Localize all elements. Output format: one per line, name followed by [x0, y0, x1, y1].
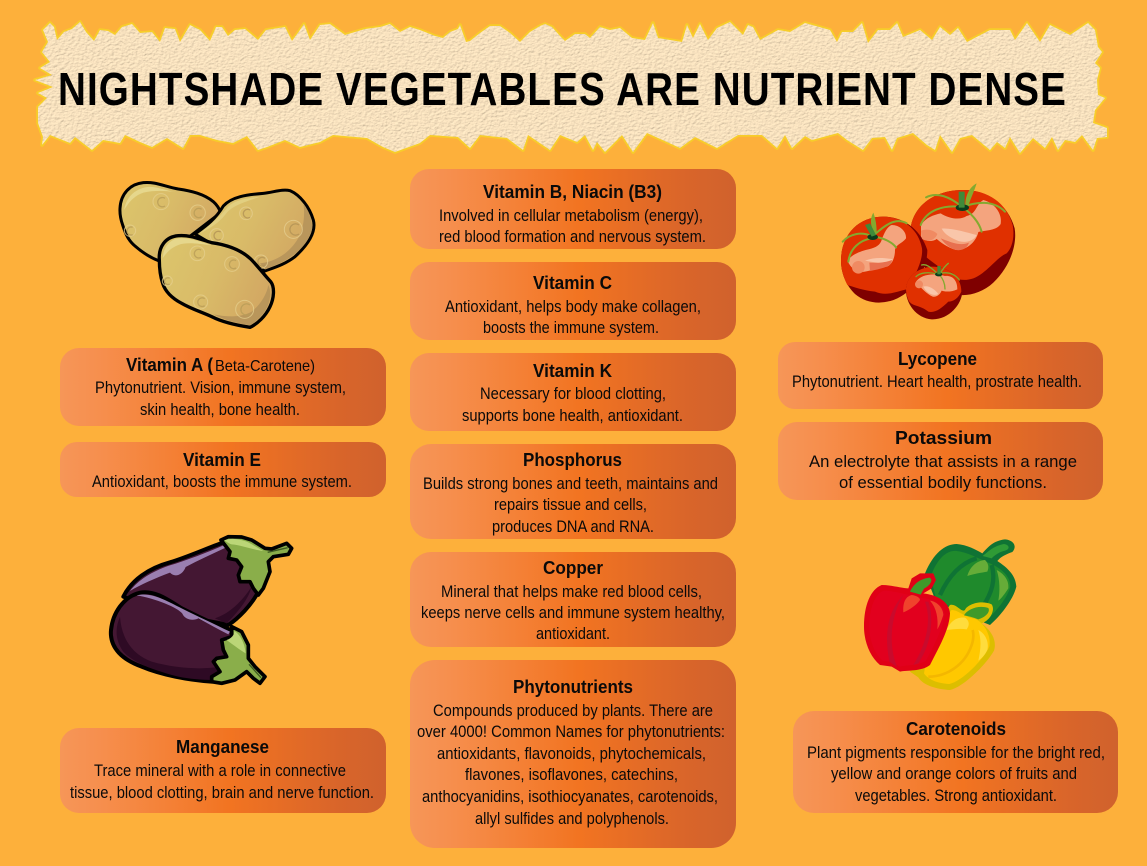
- tomato: small: [906, 263, 962, 319]
- heading: Vitamin B: Vitamin B, Niacin (B3): [483, 181, 662, 202]
- heading: Phosphorus: Phosphorus: [523, 449, 622, 470]
- body: Vitamin K: [462, 385, 683, 425]
- heading: Lycopene: Lycopene: [898, 348, 977, 369]
- body: Manganese: [70, 762, 374, 802]
- body: Phosphorus: Builds strong bones and teeth, maintains and: [423, 475, 718, 493]
- pepper: red: [864, 573, 950, 672]
- body: Phytonutrients: antioxidants, flavonoids, phytochemicals,: [437, 745, 706, 763]
- icon: potatoes: [120, 182, 314, 327]
- tomato: left: [841, 213, 927, 303]
- body: Vitamin C: boosts the immune system.: [483, 319, 659, 337]
- tomato: large: [911, 183, 1015, 295]
- eggplant caps: [212, 537, 292, 683]
- body: Copper: keeps nerve cells and immune system healthy,: [421, 604, 725, 622]
- panel: Copper: [410, 552, 736, 647]
- potato: front: [159, 236, 273, 327]
- heading: Carotenoids: Carotenoids: [906, 718, 1006, 739]
- body: Carotenoids: yellow and orange colors of fruits and: [831, 765, 1077, 783]
- eggplant: front: [111, 592, 239, 682]
- body: Carotenoids: [807, 744, 1105, 805]
- body: Vitamin A: skin health, bone health.: [140, 401, 300, 419]
- body: Carotenoids: Plant pigments responsible for the bright red,: [807, 744, 1105, 762]
- icon: bell peppers: [864, 539, 1016, 690]
- panel: Vitamin B, Niacin: [410, 169, 736, 249]
- heading: Copper: Copper: [543, 557, 603, 578]
- heading: Vitamin C: Vitamin C: [533, 272, 612, 293]
- body: Phosphorus: [423, 475, 718, 536]
- panel: Lycopene: [778, 342, 1103, 409]
- panel: Carotenoids: [793, 711, 1118, 813]
- body: Manganese: tissue, blood clotting, brain and nerve function.: [70, 784, 374, 802]
- body: Copper: antioxidant.: [536, 625, 610, 643]
- heading: Vitamin K: Vitamin K: [533, 360, 613, 381]
- panel: Vitamin C: [410, 262, 736, 340]
- potato: back left: [120, 182, 221, 261]
- body: Carotenoids: vegetables. Strong antioxidant.: [855, 787, 1057, 805]
- heading: Phytonutrients: Phytonutrients: [513, 676, 633, 697]
- body: Phosphorus: repairs tissue and cells,: [494, 496, 647, 514]
- pepper: green: [925, 539, 1016, 625]
- body: Vitamin A: Phytonutrient. Vision, immune system,: [95, 379, 346, 397]
- panel: Manganese: [60, 728, 386, 813]
- body: Vitamin C: Antioxidant, helps body make collagen,: [445, 298, 701, 316]
- body: Vitamin B: Involved in cellular metabolism (energy),: [439, 207, 703, 225]
- body: Vitamin B: [439, 207, 706, 246]
- body: Potassium: [809, 453, 1077, 492]
- body: Copper: [421, 583, 725, 643]
- body: Phytonutrients: Compounds produced by plants. There are: [433, 702, 713, 720]
- body: Vitamin E: Antioxidant, boosts the immune system.: [92, 473, 352, 491]
- body: Copper: Mineral that helps make red blood cells,: [441, 583, 702, 601]
- panel: Potassium: [778, 422, 1103, 500]
- body: Manganese: Trace mineral with a role in connective: [94, 762, 346, 780]
- body: Vitamin B: red blood formation and nervous system.: [439, 228, 706, 246]
- heading: Vitamin A: Vitamin A (: [126, 354, 214, 375]
- body: Vitamin K: Necessary for blood clotting,: [480, 385, 666, 403]
- pepper: yellow: [910, 602, 995, 690]
- body: Lycopene: Phytonutrient. Heart health, prostrate health.: [792, 373, 1082, 391]
- body: Phytonutrients: allyl sulfides and polyphenols.: [475, 810, 669, 828]
- eggplant: back: [123, 542, 258, 625]
- title banner: [35, 22, 1107, 153]
- heading suffix: Beta-Carotene: Beta-Carotene): [215, 358, 315, 375]
- body: Potassium: An electrolyte that assists in a range: [809, 453, 1077, 471]
- body: Phytonutrients: [417, 702, 725, 828]
- heading: Potassium: Potassium: [895, 427, 992, 448]
- panel: Vitamin A: [60, 348, 386, 426]
- body: Vitamin A: [95, 379, 346, 419]
- panel: Phytonutrients: [410, 660, 736, 848]
- heading: Vitamin E: Vitamin E: [183, 449, 261, 470]
- heading: Manganese: Manganese: [176, 736, 269, 757]
- body: Potassium: of essential bodily functions.: [839, 474, 1047, 492]
- body: Phytonutrients: anthocyanidins, isothiocyanates, carotenoids,: [422, 788, 718, 806]
- icon: tomatoes: [841, 183, 1015, 319]
- body: Phytonutrients: over 4000! Common Names for phytonutrients:: [417, 723, 725, 741]
- panel: Phosphorus: [410, 444, 736, 539]
- body: Vitamin C: [445, 298, 701, 337]
- body: Phosphorus: produces DNA and RNA.: [492, 518, 654, 536]
- panel: Vitamin K: [410, 353, 736, 431]
- potato: back right: [195, 190, 314, 271]
- body: Vitamin K: supports bone health, antioxidant.: [462, 407, 683, 425]
- icon: eggplants: [111, 537, 292, 683]
- body: Phytonutrients: flavones, isoflavones, catechins,: [465, 766, 678, 784]
- panel: Vitamin E: [60, 442, 386, 497]
